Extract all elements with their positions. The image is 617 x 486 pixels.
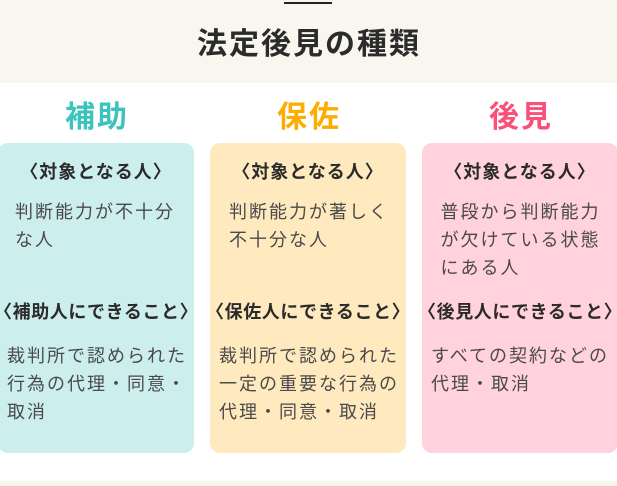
abilities text: 裁判所で認められた (7, 346, 187, 366)
abilities text: すべての契約などの (431, 346, 609, 366)
abilities heading: 〈後見人にできること〉 (418, 302, 617, 322)
header accent line (284, 2, 332, 4)
panel: 保佐 (210, 143, 406, 453)
target text: にある人 (440, 258, 520, 278)
target text: 判断能力が著しく (229, 202, 389, 222)
panel: 補助 (0, 143, 194, 453)
target text (440, 202, 600, 278)
abilities text (431, 346, 609, 394)
abilities heading: 〈保佐人にできること〉 (206, 302, 410, 322)
target text (229, 202, 389, 250)
abilities text: 取消 (7, 402, 47, 422)
abilities text (7, 346, 187, 422)
target text: が欠けている状態 (440, 230, 600, 250)
abilities heading: 〈補助人にできること〉 (0, 302, 198, 322)
abilities text: 一定の重要な行為の (219, 374, 399, 394)
target heading: 〈対象となる人〉 (444, 162, 596, 182)
header band (0, 0, 617, 83)
target text: 判断能力が不十分 (15, 202, 175, 222)
title: 法定後見の種類 (197, 28, 421, 61)
abilities text: 代理・取消 (431, 374, 531, 394)
target heading: 〈対象となる人〉 (232, 162, 384, 182)
target text: 不十分な人 (229, 230, 329, 250)
abilities text (219, 346, 399, 422)
heading: 補助: 補助 (65, 101, 129, 134)
abilities text: 代理・同意・取消 (219, 402, 379, 422)
target heading: 〈対象となる人〉 (20, 162, 172, 182)
abilities text: 行為の代理・同意・ (7, 374, 187, 394)
target text: な人 (15, 230, 55, 250)
footer band (0, 481, 617, 486)
target text (15, 202, 175, 250)
heading: 後見: 後見 (489, 101, 553, 134)
heading: 保佐: 保佐 (277, 101, 341, 134)
panel: 後見 (422, 143, 617, 453)
target text: 普段から判断能力 (440, 202, 600, 222)
abilities text: 裁判所で認められた (219, 346, 399, 366)
